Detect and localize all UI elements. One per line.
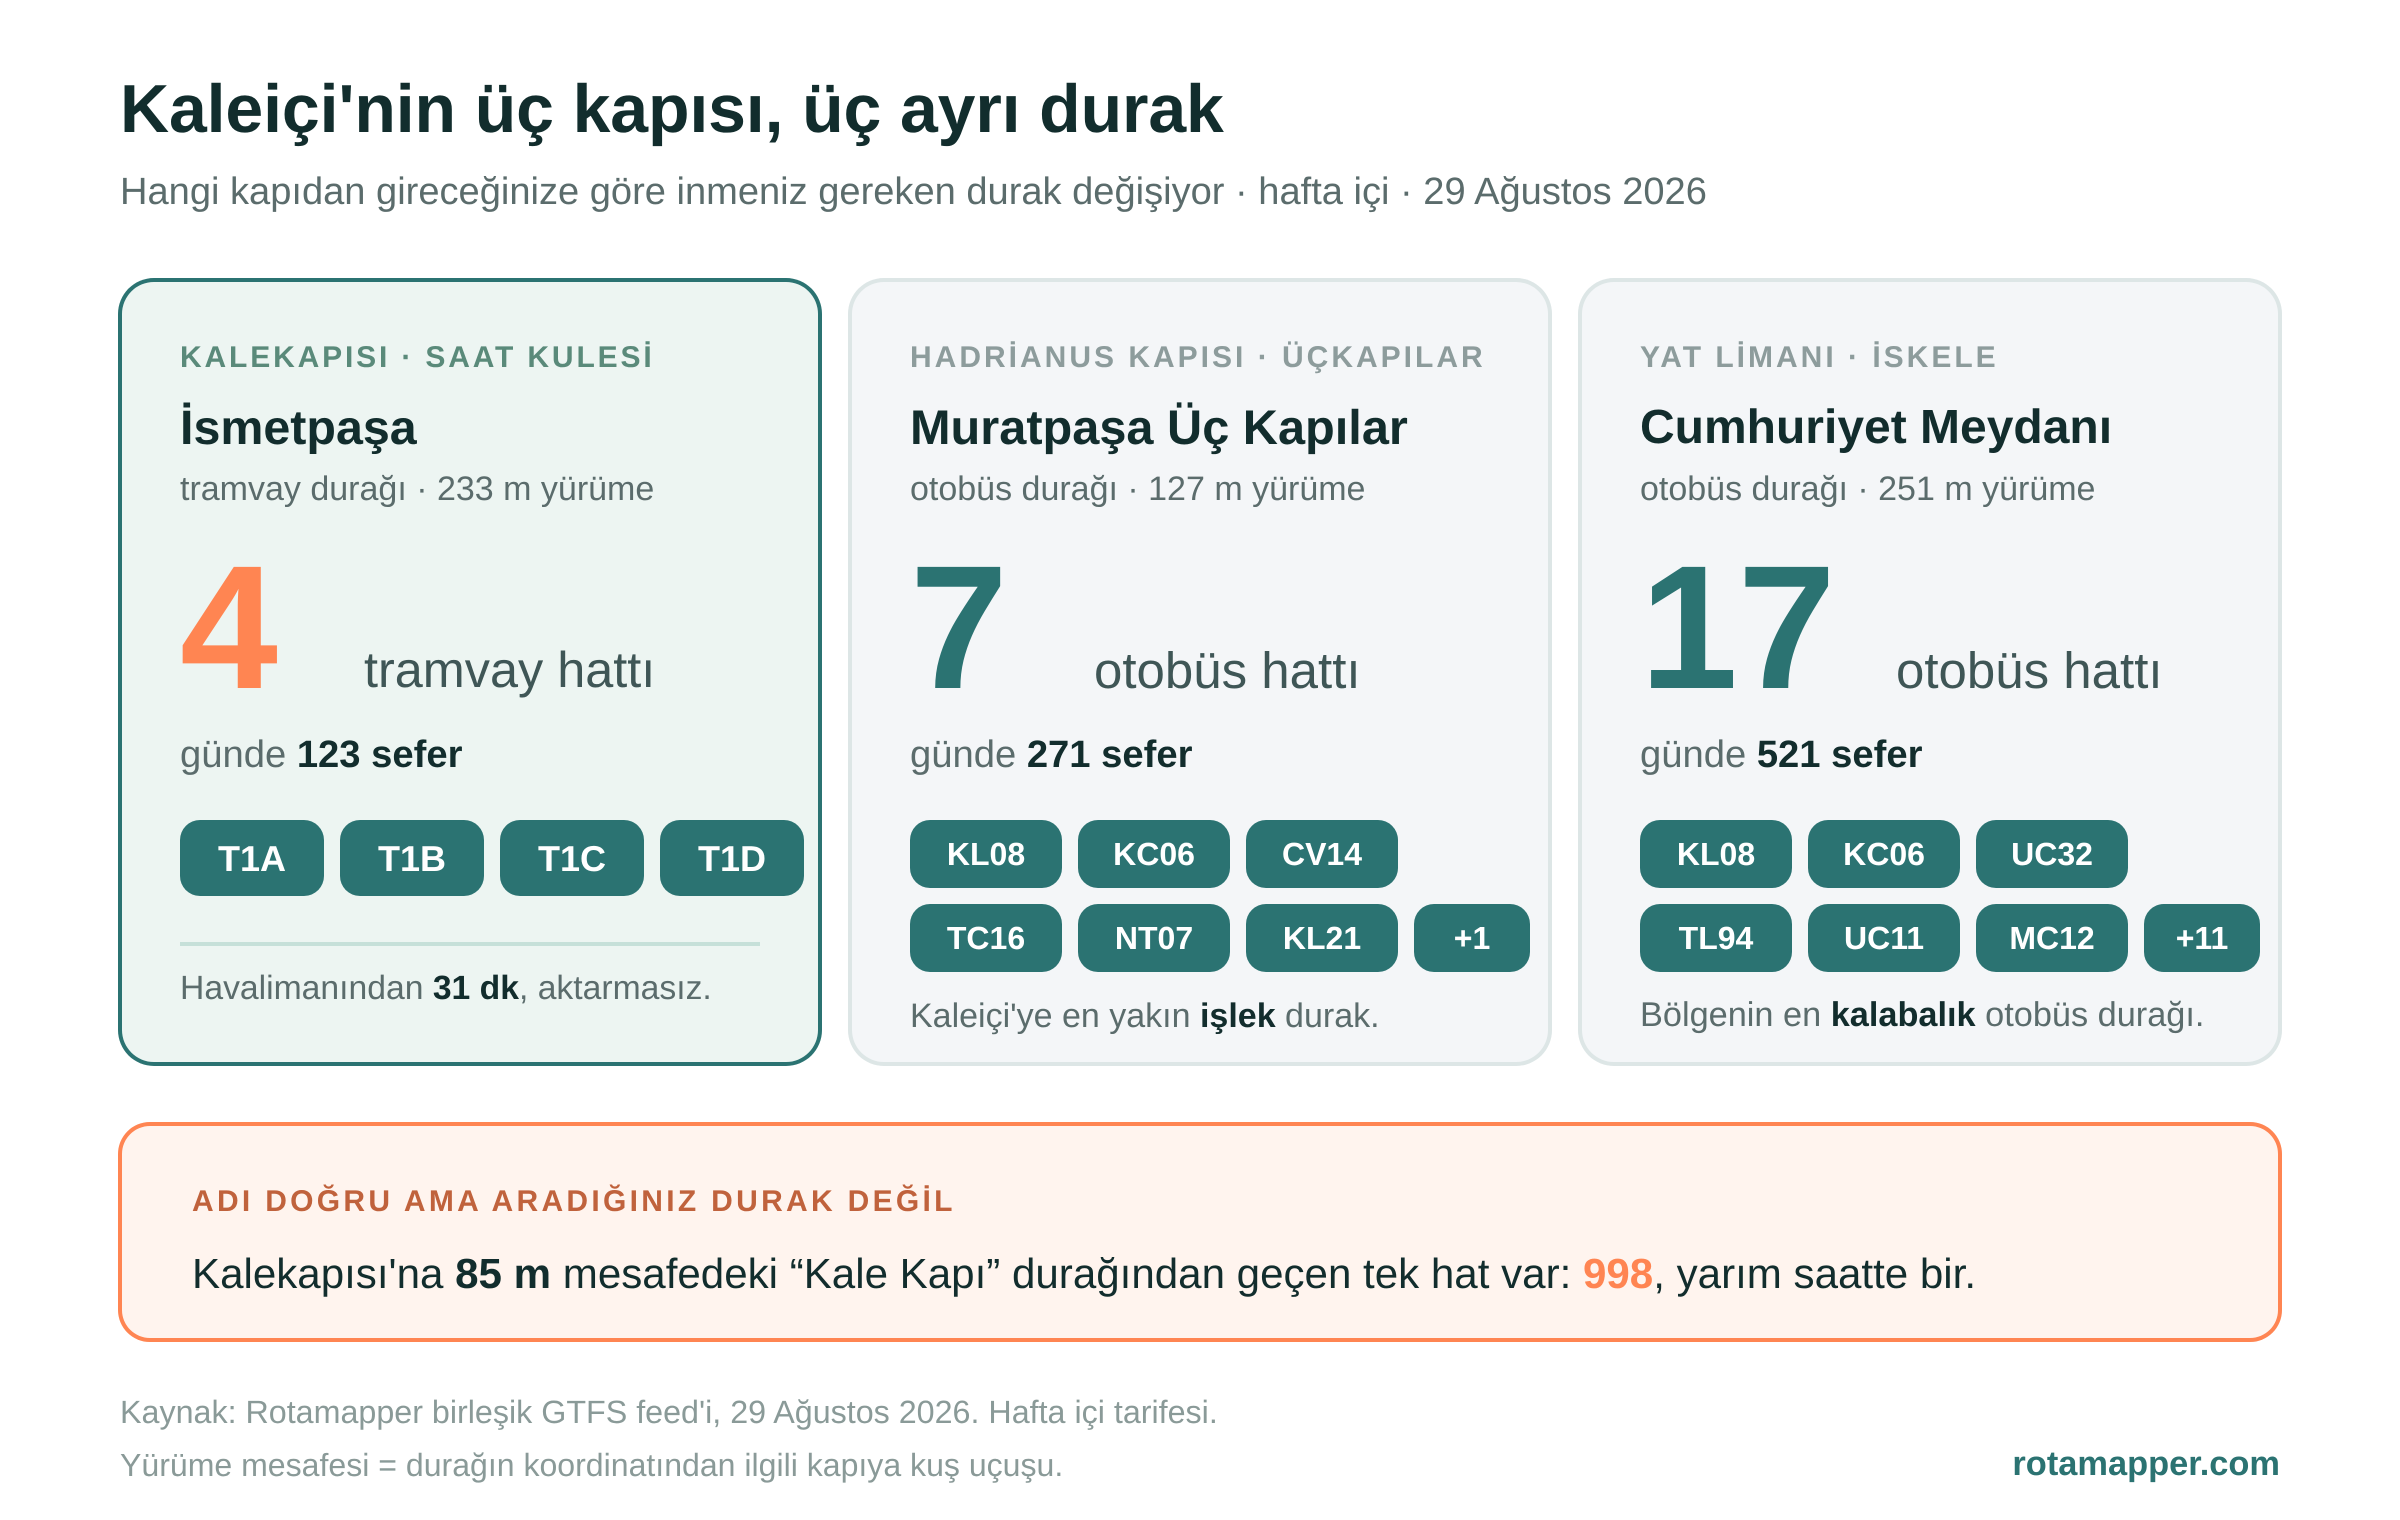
line chips: KC06	[1843, 836, 1925, 872]
line chips: +11	[2176, 920, 2228, 956]
unit label: tramvay hattı	[364, 641, 655, 698]
line chips: MC12	[2009, 920, 2095, 956]
stop type and walk: otobüs durağı · 251 m yürüme	[1640, 470, 2095, 508]
stop name: Muratpaşa Üç Kapılar	[910, 401, 1408, 455]
subtitle: Hangi kapıdan gireceğinize göre inmeniz gereken durak değişiyor · hafta içi · 29 Ağustos 2026	[120, 170, 1707, 212]
big number: 7	[910, 530, 1008, 726]
stop type and walk: tramvay durağı · 233 m yürüme	[180, 470, 654, 508]
eyebrow: HADRİANUS KAPISI · ÜÇKAPILAR	[910, 341, 1486, 374]
line chips: T1D	[698, 838, 766, 879]
line chips: TL94	[1679, 920, 1753, 956]
callout text: Kalekapısı'na 85 m mesafedeki “Kale Kapı” durağından geçen tek hat var: 998, yarım saatte bir.	[192, 1250, 1976, 1297]
panel: Kalekapısı card	[118, 278, 822, 1066]
panel: Yat Limanı card	[1578, 278, 2282, 1066]
daily trips: günde 123 sefer	[180, 732, 462, 776]
source note: Kaynak: Rotamapper birleşik GTFS feed'i, 29 Ağustos 2026. Hafta içi tarifesi.	[120, 1394, 1218, 1430]
divider	[180, 942, 760, 946]
stop name: İsmetpaşa	[180, 401, 417, 455]
title: Kaleiçi'nin üç kapısı, üç ayrı durak	[120, 70, 1224, 146]
line chips: CV14	[1282, 836, 1362, 872]
line chips: TC16	[947, 920, 1025, 956]
callout: warning	[118, 1122, 2282, 1342]
line chips: T1C	[538, 838, 606, 879]
line chips	[910, 820, 1530, 972]
eyebrow: KALEKAPISI · SAAT KULESİ	[180, 341, 655, 374]
line chips: UC11	[1844, 920, 1924, 956]
line chips	[1640, 820, 2260, 972]
unit label: otobüs hattı	[1896, 642, 2163, 699]
daily trips: günde 521 sefer	[1640, 732, 1922, 776]
line chips: T1B	[378, 838, 446, 879]
stop name: Cumhuriyet Meydanı	[1640, 401, 2112, 454]
line chips: UC32	[2011, 836, 2093, 872]
note: Havalimanından 31 dk, aktarmasız.	[180, 969, 712, 1007]
note: Kaleiçi'ye en yakın işlek durak.	[910, 996, 1380, 1034]
eyebrow: YAT LİMANI · İSKELE	[1640, 341, 1999, 374]
line chips: KL08	[947, 836, 1025, 872]
note: Bölgenin en kalabalık otobüs durağı.	[1640, 996, 2204, 1034]
line chips: KL21	[1283, 920, 1361, 956]
line chips: KL08	[1677, 836, 1755, 872]
method note: Yürüme mesafesi = durağın koordinatından ilgili kapıya kuş uçuşu.	[120, 1447, 1063, 1483]
panel: Hadrianus card	[848, 278, 1552, 1066]
daily trips: günde 271 sefer	[910, 732, 1192, 776]
brand: rotamapper.com	[2012, 1445, 2280, 1483]
big number: 4	[180, 530, 278, 726]
line chips	[180, 820, 804, 896]
line chips: T1A	[218, 838, 286, 879]
unit label: otobüs hattı	[1094, 642, 1361, 699]
line chips: NT07	[1115, 920, 1193, 956]
stop type and walk: otobüs durağı · 127 m yürüme	[910, 470, 1365, 508]
big number: 17	[1640, 530, 1836, 726]
line chips: KC06	[1113, 836, 1195, 872]
line chips: +1	[1454, 920, 1490, 956]
callout heading: ADI DOĞRU AMA ARADIĞINIZ DURAK DEĞİL	[192, 1185, 956, 1218]
